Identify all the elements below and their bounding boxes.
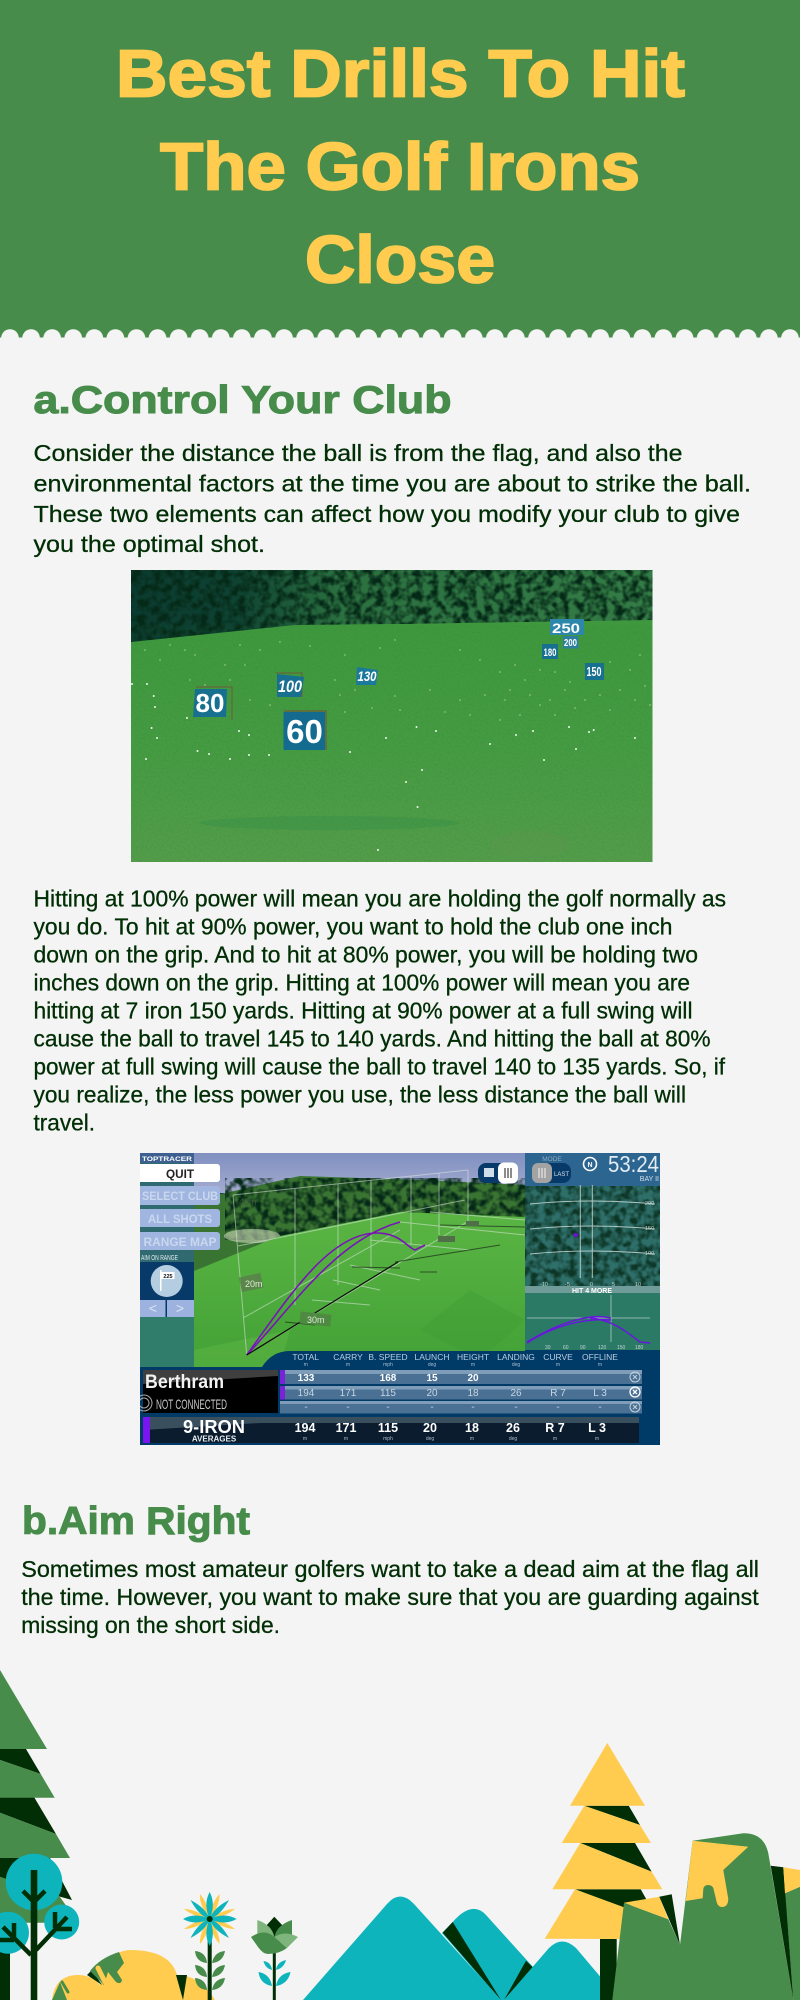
shot rows	[280, 1370, 642, 1414]
stats panel header: OFFLINE	[582, 1352, 618, 1362]
flag dial	[151, 1265, 183, 1297]
stats panel header: m	[556, 1362, 560, 1368]
averages row: AVERAGES	[192, 1434, 237, 1444]
aim arrows: >	[176, 1300, 184, 1316]
text block: aim right	[21, 1556, 759, 1638]
heading: control your club: a.Control Your Club	[34, 379, 452, 422]
text block: club intro: you the optimal shot.	[34, 531, 265, 557]
stats panel header: TOTAL	[292, 1352, 319, 1362]
averages row: L 3	[588, 1421, 606, 1435]
averages row: 18	[465, 1421, 479, 1435]
text block: power percentages: travel.	[34, 1110, 95, 1136]
3D grid	[233, 1170, 525, 1355]
averages row: 194	[295, 1421, 315, 1435]
shot rows: 194	[298, 1388, 315, 1399]
text block: aim right: missing on the short side.	[21, 1612, 280, 1638]
stats panel header: deg	[512, 1362, 520, 1368]
right side charts panel: 150	[645, 1226, 654, 1232]
text block: power percentages: hitting at 7 iron 150 yards. Hitting at 90% power at a full swing will	[34, 998, 692, 1024]
shot rows: 133	[298, 1373, 315, 1384]
illustration: tulip	[251, 1917, 298, 2000]
right side charts panel: 10	[635, 1282, 641, 1288]
sign: 80	[193, 687, 232, 720]
text block: aim right: the time. However, you want to make sure that you are guarding against	[21, 1584, 759, 1610]
text block: power percentages: power at full swing will cause the ball to travel 140 to 135 yards. So, if	[34, 1054, 726, 1080]
stats panel header: deg	[428, 1362, 436, 1368]
stats panel header: LAUNCH	[415, 1352, 449, 1362]
screenshot: Toptracer golf simulator	[130, 1151, 660, 1445]
view toggle	[478, 1162, 518, 1184]
title	[116, 36, 685, 298]
mode switch	[532, 1156, 571, 1183]
illustration: teal round trees	[0, 1854, 79, 2000]
shot rows: L 3	[593, 1388, 607, 1399]
sign: 100	[276, 673, 304, 697]
distance tags	[239, 1197, 479, 1327]
golf balls on the range	[132, 684, 635, 850]
left control panel: TOPTRACER	[142, 1156, 192, 1163]
right side charts panel: 180	[635, 1345, 644, 1351]
text block: power percentages: down on the grip. And to hit at 80% power, you will be holding two	[34, 942, 698, 968]
shot rows: -	[386, 1402, 390, 1413]
averages row: R 7	[545, 1421, 565, 1435]
stats panel header: m	[346, 1362, 350, 1368]
mode switch: LAST	[554, 1172, 569, 1178]
right side charts panel: 150	[617, 1345, 626, 1351]
text block: power percentages	[34, 886, 726, 1136]
averages row: m	[344, 1436, 348, 1442]
SELECT CLUB button	[140, 1186, 220, 1205]
session clock	[582, 1156, 658, 1181]
shot rows: R 7	[550, 1388, 566, 1399]
distance tags: 40m	[239, 1197, 257, 1207]
photo: driving range with distance signs	[131, 570, 653, 863]
sign: 180	[542, 644, 558, 659]
session clock: N	[587, 1162, 593, 1169]
shot rows: -	[514, 1402, 518, 1413]
mode switch: MODE	[542, 1156, 562, 1163]
left control panel	[140, 1153, 220, 1367]
right side charts panel: 60	[563, 1345, 569, 1351]
distance tags: 30m	[307, 1315, 325, 1325]
stats panel header: m	[598, 1362, 602, 1368]
stats panel header: m	[304, 1362, 308, 1368]
averages row: mph	[383, 1436, 393, 1442]
averages row: m	[470, 1436, 474, 1442]
sign: 100: 100	[278, 677, 302, 696]
illustration: yellow bush	[52, 1950, 215, 2000]
shot rows: -	[430, 1402, 434, 1413]
QUIT button	[140, 1164, 220, 1182]
averages row: 20	[423, 1421, 437, 1435]
shot rows: 20	[426, 1388, 438, 1399]
shot rows: 18	[467, 1388, 479, 1399]
right side charts panel: 0	[590, 1282, 593, 1288]
sign: 150: 150	[586, 664, 602, 679]
shot rows: 20	[467, 1373, 479, 1384]
averages row: m	[553, 1436, 557, 1442]
right side charts panel: -10	[540, 1282, 548, 1288]
shot rows: 115	[380, 1388, 396, 1399]
stats panel header: HEIGHT	[457, 1352, 489, 1362]
shot rows: -	[471, 1402, 475, 1413]
illustration: yellow pine tree	[545, 1743, 662, 2000]
sign: 180: 180	[544, 647, 556, 659]
shot rows: 15	[426, 1373, 438, 1384]
shot rows: 168	[380, 1373, 397, 1384]
illustration: green rock with yellow moss	[612, 1833, 800, 2000]
heading: aim right: b.Aim Right	[22, 1500, 250, 1543]
text block: club intro: These two elements can affect how you modify your club to give	[34, 501, 740, 527]
flag dial: 225	[163, 1274, 173, 1280]
RANGE MAP button: RANGE MAP	[144, 1235, 216, 1249]
title: Close	[305, 222, 495, 298]
left control panel: AIM ON RANGE	[141, 1255, 178, 1262]
averages row: m	[303, 1436, 307, 1442]
header banner with scalloped edge	[0, 0, 800, 340]
sign: 60: 60	[286, 713, 323, 750]
sign: 130: 130	[358, 668, 377, 684]
text block: club intro: environmental factors at the time you are about to strike the ball.	[34, 470, 751, 496]
sign: 200: 200	[564, 638, 577, 649]
SELECT CLUB button: SELECT CLUB	[142, 1189, 218, 1203]
session clock: BAY II	[640, 1176, 659, 1183]
illustration: daisy flower	[183, 1892, 237, 2000]
sign: 150	[585, 663, 604, 680]
stats panel header: m	[471, 1362, 475, 1368]
text block: power percentages: you do. To hit at 90% power, you want to hold the club one inch	[34, 914, 672, 940]
text block: power percentages: cause the ball to travel 145 to 140 yards. And hitting the ball at 80%	[34, 1026, 710, 1052]
shot rows: -	[598, 1402, 602, 1413]
aim arrows: <	[149, 1300, 157, 1316]
stats panel header: CURVE	[543, 1352, 573, 1362]
averages row: deg	[426, 1436, 434, 1442]
averages row: m	[595, 1436, 599, 1442]
shot tracer arcs	[247, 1233, 425, 1355]
stats panel header: LANDING	[497, 1352, 535, 1362]
text block: club intro	[34, 440, 751, 557]
illustration: green pine tree	[0, 1670, 78, 2000]
averages row: 26	[506, 1421, 520, 1435]
sign: 250: 250	[552, 620, 580, 636]
text block: power percentages: inches down on the grip. Hitting at 100% power will mean you are	[34, 970, 690, 996]
shot rows: -	[304, 1402, 308, 1413]
stats panel header: mph	[383, 1362, 393, 1368]
title: Best Drills To Hit	[116, 36, 685, 112]
illustration: teal mountains	[303, 1896, 620, 2000]
averages row: 115	[378, 1421, 398, 1435]
averages row: deg	[509, 1436, 517, 1442]
right side charts panel: 100	[645, 1251, 654, 1257]
title: The Golf Irons	[160, 130, 640, 204]
averages row: 171	[336, 1421, 356, 1435]
shot rows: -	[556, 1402, 560, 1413]
shot rows: 171	[340, 1388, 357, 1399]
session clock: 53:24	[608, 1151, 659, 1177]
stats panel header	[262, 1351, 618, 1367]
player card: NOT CONNECTED	[156, 1396, 227, 1412]
text block: club intro: Consider the distance the ball is from the flag, and also the	[34, 440, 683, 466]
text block: power percentages: Hitting at 100% power will mean you are holding the golf normally as	[34, 886, 726, 912]
right side charts panel: 200	[645, 1201, 654, 1207]
grass fairway	[194, 1212, 525, 1367]
sign: 250	[550, 619, 584, 636]
right side charts panel: 120	[598, 1345, 607, 1351]
right side charts panel: HIT 4 MORE	[572, 1288, 612, 1295]
shot rows: -	[346, 1402, 350, 1413]
right side charts panel	[525, 1151, 660, 1351]
averages row: 9-IRON	[183, 1417, 245, 1437]
right side charts panel: -5	[565, 1282, 570, 1288]
right side charts panel: 5	[612, 1282, 615, 1288]
right side charts panel: 30	[545, 1345, 551, 1351]
sign: 80: 80	[196, 688, 224, 718]
player card: Berthram	[145, 1372, 224, 1393]
aim arrows	[140, 1300, 194, 1317]
player card	[136, 1370, 278, 1413]
ALL SHOTS button	[140, 1209, 220, 1227]
QUIT button: QUIT	[166, 1167, 195, 1181]
averages row	[143, 1417, 639, 1444]
stats panel header: B. SPEED	[368, 1352, 408, 1362]
text block: aim right: Sometimes most amateur golfers want to take a dead aim at the flag all	[21, 1556, 759, 1582]
stats panel header: CARRY	[333, 1352, 363, 1362]
text block: power percentages: you realize, the less power you use, the less distance the ball will	[34, 1082, 686, 1108]
shot rows: 26	[510, 1388, 522, 1399]
right side charts panel: 90	[580, 1345, 586, 1351]
distance tags: 20m	[245, 1279, 263, 1289]
ALL SHOTS button: ALL SHOTS	[148, 1212, 212, 1226]
